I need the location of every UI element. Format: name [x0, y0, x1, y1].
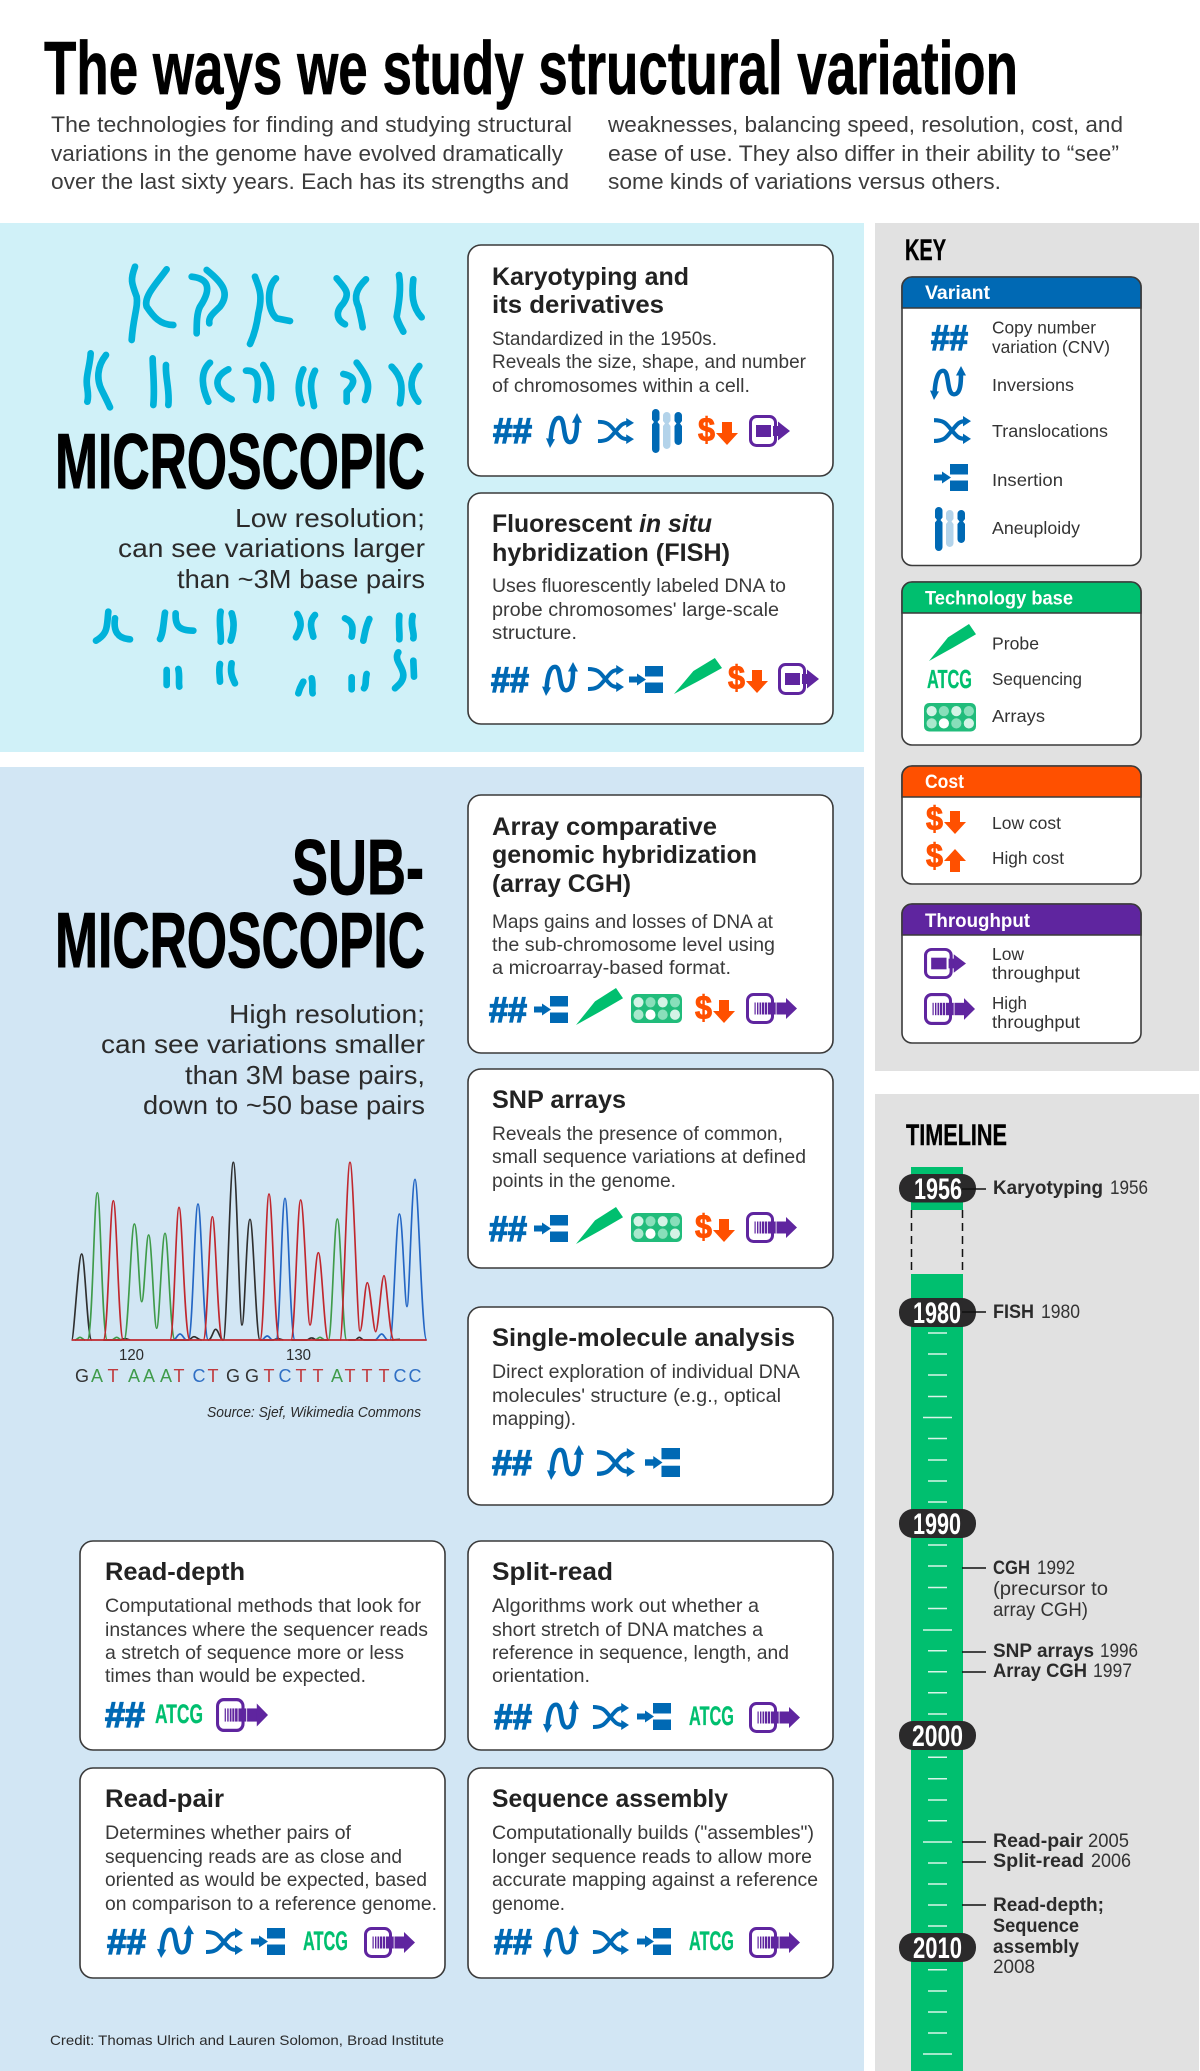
chart base letters: C: [192, 1366, 206, 1386]
card description: accurate mapping against a reference: [492, 1869, 818, 1891]
chart axis numbers: [119, 1347, 311, 1364]
chart base letters: C: [278, 1366, 292, 1386]
chart base letters: G: [226, 1366, 240, 1386]
card: array CGH: [468, 795, 833, 1053]
icon: insertion: [645, 1448, 680, 1477]
timeline entry: array CGH: Array CGH: [993, 1660, 1087, 1682]
label: high throughput: throughput: [992, 1012, 1080, 1032]
card description: Maps gains and losses of DNA at: [492, 911, 774, 933]
text: microscopic resolution: Low resolution;: [235, 503, 425, 533]
label: insertion: Insertion: [992, 470, 1063, 490]
chart base letters: T: [174, 1366, 184, 1386]
card description: Reveals the presence of common,: [492, 1123, 783, 1145]
card: single-molecule analysis: [468, 1307, 833, 1505]
chart base letters: T: [208, 1366, 218, 1386]
text: microscopic resolution: can see variations larger: [118, 533, 425, 563]
label: low cost: Low cost: [992, 813, 1061, 833]
chart base letters: C: [394, 1366, 406, 1386]
icon: probe: [576, 1207, 623, 1244]
timeline entry: read-depth and sequence assembly: Read-depth;: [993, 1894, 1104, 1916]
card description: a stretch of sequence more or less: [105, 1642, 404, 1664]
timeline entry: read-depth and sequence assembly: 2008: [993, 1956, 1035, 1978]
label: low throughput: throughput: [992, 963, 1080, 983]
timeline entry: FISH: FISH: [993, 1301, 1034, 1323]
card icons: [494, 1923, 800, 1962]
timeline bar: [911, 1167, 963, 2071]
card heading: Single-molecule analysis: [492, 1324, 795, 1352]
icon: low cost: $: [695, 1208, 712, 1245]
icon: sequencing: ATCG: [689, 1701, 734, 1731]
card: sequence assembly: [468, 1768, 833, 1978]
card description: genome.: [492, 1893, 565, 1915]
card description: [492, 1822, 818, 1915]
chart base letters: T: [378, 1366, 390, 1386]
card description: orientation.: [492, 1665, 590, 1687]
icon: high throughput: [218, 1700, 268, 1730]
timeline entry: read-pair: 2005: [1088, 1830, 1129, 1852]
heading: sub-microscopic: [55, 823, 425, 984]
icon: inversion: [547, 1445, 584, 1480]
icon: translocation: [934, 416, 971, 444]
chart axis numbers: 130: [286, 1347, 311, 1364]
chart: sequencing chromatogram: [72, 1162, 427, 1421]
icon: low cost: $: [728, 659, 745, 696]
icon: copy number: ##: [105, 1696, 145, 1735]
chart base letters: T: [296, 1366, 306, 1386]
card: split-read: [468, 1541, 833, 1750]
text: sub-microscopic resolution: down to ~50 base pairs: [143, 1090, 425, 1120]
card description: oriented as would be expected, based: [105, 1869, 427, 1891]
card heading: genomic hybridization: [492, 841, 757, 869]
text: sub-microscopic resolution: High resolution;: [229, 999, 425, 1029]
card heading: [492, 510, 730, 567]
timeline entry: read-pair: Read-pair: [993, 1830, 1083, 1852]
card icons: [491, 658, 819, 700]
panel: key: [875, 223, 1199, 1071]
intro text: over the last sixty years. Each has its strengths and: [51, 169, 569, 194]
chart base letters: A: [128, 1366, 140, 1386]
timeline entry: karyotyping: 1956: [1110, 1177, 1148, 1199]
illustration: chromosomes upper: [87, 267, 422, 407]
timeline entry: CGH: [993, 1557, 1108, 1621]
year pill: 1990: 1990: [913, 1508, 961, 1541]
icon: insertion: [637, 1703, 671, 1730]
card description: a microarray-based format.: [492, 957, 731, 979]
intro text: [51, 112, 1123, 194]
label: aneuploidy: Aneuploidy: [992, 518, 1080, 538]
icon: translocation: [593, 1703, 629, 1730]
icon: inversion: [546, 413, 582, 448]
icon: insertion: [629, 666, 663, 693]
card description: short stretch of DNA matches a: [492, 1619, 763, 1641]
chart base letters: T: [108, 1366, 118, 1386]
chart base letters: T: [264, 1366, 274, 1386]
year pill: 1980: 1980: [913, 1297, 961, 1330]
icon: aneuploidy: [652, 409, 682, 453]
icon: arrays: [631, 1213, 682, 1242]
card description: [492, 911, 775, 979]
timeline entry: CGH: 1992: [1037, 1557, 1075, 1579]
intro text: The technologies for finding and studying structural: [51, 112, 572, 137]
icon: translocation: [598, 418, 634, 444]
icon: high throughput: [926, 995, 975, 1023]
card heading: Split-read: [492, 1558, 613, 1586]
icon: copy number: ##: [493, 412, 532, 451]
card description: molecules' structure (e.g., optical: [492, 1385, 781, 1407]
icon: high cost: [926, 837, 966, 874]
card heading: Karyotyping and: [492, 263, 689, 291]
text: sub-microscopic resolution: [101, 999, 425, 1120]
timeline entry: FISH: [993, 1301, 1080, 1323]
icon: copy number: ##: [492, 1444, 532, 1483]
icon: high throughput: [750, 1704, 800, 1732]
label: copy number: variation (CNV): [992, 337, 1110, 357]
timeline entry: karyotyping: Karyotyping: [993, 1177, 1103, 1199]
timeline entry: CGH: CGH: [993, 1557, 1030, 1579]
card heading: [492, 813, 757, 898]
credit: Credit: Thomas Ulrich and Lauren Solomon, Broad Institute: [50, 2032, 444, 2048]
label: low throughput: Low: [992, 944, 1024, 964]
chart base letters: T: [344, 1366, 356, 1386]
card heading: Read-depth: [105, 1558, 245, 1586]
icon: inversion: [157, 1925, 194, 1958]
icon: low cost: $: [926, 800, 943, 837]
label: low throughput: [992, 944, 1080, 983]
label: inversions: Inversions: [992, 375, 1074, 395]
card description: on comparison to a reference genome.: [105, 1893, 437, 1915]
card description: sequencing reads are as close and: [105, 1846, 402, 1868]
card: FISH: [468, 493, 833, 724]
icon: insertion: [534, 996, 568, 1023]
timeline entry: SNP arrays: SNP arrays: [993, 1640, 1094, 1662]
card heading: Array comparative: [492, 813, 717, 841]
card heading: [492, 263, 689, 319]
timeline heading: TIMELINE: [906, 1119, 1007, 1152]
text: microscopic resolution: than ~3M base pairs: [177, 564, 425, 594]
label: high throughput: High: [992, 993, 1027, 1013]
chart base letters: A: [143, 1366, 155, 1386]
icon: insertion: [934, 464, 968, 491]
card heading: SNP arrays: [492, 1086, 626, 1114]
intro text: some kinds of variations versus others.: [608, 169, 1001, 194]
chart base letters: A: [331, 1366, 343, 1386]
card description: [492, 575, 786, 644]
icon: copy number: ##: [491, 661, 529, 700]
icon: probe: [576, 988, 623, 1025]
icon: low cost: [728, 659, 768, 696]
year pill: 2010: 2010: [913, 1932, 962, 1965]
icon: low throughput: [750, 416, 790, 446]
card description: structure.: [492, 622, 577, 644]
card description: times than would be expected.: [105, 1665, 366, 1687]
card description: reference in sequence, length, and: [492, 1642, 789, 1664]
icon: low cost: $: [698, 411, 715, 448]
card description: Computational methods that look for: [105, 1595, 422, 1617]
card description: Uses fluorescently labeled DNA to: [492, 575, 786, 597]
icon: low cost: [698, 411, 738, 448]
card icons: [492, 1444, 680, 1483]
icon: translocation: [206, 1928, 243, 1955]
intro text: weaknesses, balancing speed, resolution, cost, and: [607, 112, 1123, 137]
card description: [105, 1822, 437, 1915]
card icons: [494, 1698, 800, 1737]
icon: copy number: ##: [931, 319, 968, 358]
card heading: Sequence assembly: [492, 1785, 728, 1813]
icon: low cost: [926, 800, 966, 837]
timeline entry: read-pair: [993, 1830, 1129, 1852]
icon: low throughput: [926, 949, 966, 978]
card description: Standardized in the 1950s.: [492, 328, 717, 350]
timeline entry: SNP arrays: 1996: [1100, 1640, 1138, 1662]
icon: sequencing: ATCG: [155, 1699, 203, 1729]
card description: Determines whether pairs of: [105, 1822, 352, 1844]
panel: timeline: [875, 1094, 1199, 2071]
icon: sequencing: ATCG: [927, 664, 972, 694]
icon: probe: [929, 624, 976, 661]
year pill: 2000: 2000: [912, 1720, 963, 1753]
label: arrays: Arrays: [992, 706, 1045, 726]
key box heading: Cost: [925, 772, 965, 793]
timeline entry: read-depth and sequence assembly: Sequence: [993, 1915, 1079, 1937]
card description: points in the genome.: [492, 1170, 676, 1192]
label: copy number: Copy number: [992, 318, 1096, 338]
text: sub-microscopic resolution: than 3M base pairs,: [185, 1060, 425, 1090]
card description: the sub-chromosome level using: [492, 934, 775, 956]
icon: arrays: [631, 994, 682, 1023]
timeline entry: CGH: array CGH): [993, 1599, 1088, 1621]
card description: small sequence variations at defined: [492, 1146, 806, 1168]
intro text: ease of use. They also differ in their ability to “see”: [608, 141, 1119, 166]
heading: microscopic: MICROSCOPIC: [55, 417, 425, 505]
icon: translocation: [588, 665, 624, 692]
card description: probe chromosomes' large-scale: [492, 599, 779, 621]
key box heading: Technology base: [925, 588, 1073, 610]
timeline entry: split-read: 2006: [1091, 1850, 1131, 1872]
icon: inversion: [543, 1700, 579, 1733]
timeline entry: read-depth and sequence assembly: [993, 1894, 1104, 1978]
icon: insertion: [251, 1928, 285, 1955]
chart base letters: T: [362, 1366, 372, 1386]
icon: copy number: ##: [489, 991, 527, 1030]
card heading: Fluorescent in situ: [492, 510, 712, 538]
label: translocations: Translocations: [992, 421, 1108, 441]
icon: copy number: ##: [107, 1923, 146, 1962]
chart base letters: A: [91, 1366, 103, 1386]
text: microscopic resolution: [118, 503, 425, 594]
chart base letters: G: [75, 1366, 89, 1386]
card: karyotyping: [468, 245, 833, 476]
card description: [492, 1361, 800, 1430]
icon: inversion: [542, 662, 578, 696]
icon: copy number: ##: [494, 1923, 532, 1962]
card: read-pair: [80, 1768, 445, 1978]
panel: microscopic: [0, 223, 864, 752]
icon: inversion: [543, 1925, 579, 1958]
card heading: (array CGH): [492, 870, 631, 898]
leader lines: [962, 1189, 986, 1905]
card description: [105, 1595, 428, 1687]
card icons: [107, 1923, 415, 1962]
key box: variant: [902, 277, 1141, 566]
card heading: hybridization (FISH): [492, 539, 730, 567]
icon: arrays: [924, 703, 976, 732]
card description: Algorithms work out whether a: [492, 1595, 759, 1617]
icon: low cost: $: [695, 989, 712, 1026]
card: read-depth: [80, 1541, 445, 1750]
card description: Computationally builds ("assembles"): [492, 1822, 814, 1844]
heading: sub-microscopic: SUB-: [292, 823, 424, 911]
intro text: variations in the genome have evolved dramatically: [51, 141, 563, 166]
icon: high cost: $: [926, 837, 943, 874]
icon: sequencing: ATCG: [689, 1926, 734, 1956]
card description: instances where the sequencer reads: [105, 1619, 428, 1641]
timeline entry: array CGH: 1997: [1093, 1660, 1132, 1682]
heading: sub-microscopic: MICROSCOPIC: [55, 896, 425, 984]
chart source: Source: Sjef, Wikimedia Commons: [207, 1405, 421, 1421]
icon: copy number: ##: [494, 1698, 532, 1737]
timeline entry: FISH: 1980: [1041, 1301, 1080, 1323]
text: sub-microscopic resolution: can see variations smaller: [101, 1029, 425, 1059]
card heading: its derivatives: [492, 291, 664, 319]
icon: low cost: [695, 1208, 735, 1245]
key box heading: Variant: [925, 283, 991, 304]
card description: of chromosomes within a cell.: [492, 375, 750, 397]
label: high throughput: [992, 993, 1080, 1032]
card description: Reveals the size, shape, and number: [492, 351, 806, 373]
label: copy number: [992, 318, 1110, 357]
chart base letters: G: [245, 1366, 259, 1386]
key box: throughput: [902, 904, 1141, 1043]
card icons: [489, 1207, 797, 1249]
icon: sequencing: ATCG: [303, 1926, 348, 1956]
illustration: chromosomes lower: [96, 612, 414, 693]
card heading: Read-pair: [105, 1785, 224, 1813]
timeline entry: split-read: [993, 1850, 1131, 1872]
label: high cost: High cost: [992, 848, 1064, 868]
timeline entry: read-depth and sequence assembly: assembly: [993, 1936, 1079, 1958]
year pill: 1956: 1956: [914, 1173, 962, 1206]
icon: insertion: [534, 1215, 568, 1242]
card description: Direct exploration of individual DNA: [492, 1361, 800, 1383]
icon: high throughput: [748, 1214, 797, 1242]
icon: high throughput: [366, 1928, 415, 1956]
card description: [492, 1123, 806, 1192]
timeline entry: split-read: Split-read: [993, 1850, 1084, 1872]
key heading: KEY: [905, 234, 946, 267]
label: probe: Probe: [992, 634, 1039, 654]
icon: insertion: [637, 1928, 671, 1955]
timeline entry: CGH: (precursor to: [993, 1578, 1108, 1600]
chart base letters: A: [160, 1366, 172, 1386]
icon: copy number: ##: [489, 1210, 527, 1249]
card icons: [493, 409, 790, 453]
icon: probe: [674, 658, 722, 694]
card: SNP arrays: [468, 1069, 833, 1268]
icon: inversion: [930, 366, 966, 400]
card description: longer sequence reads to allow more: [492, 1846, 812, 1868]
icon: low cost: [695, 989, 735, 1026]
card icons: [489, 988, 797, 1030]
icon: translocation: [593, 1928, 629, 1955]
icon: translocation: [597, 1448, 635, 1477]
card description: [492, 328, 806, 397]
chart base letters: T: [312, 1366, 324, 1386]
icon: aneuploidy: [935, 507, 965, 551]
key box: technology base: [902, 582, 1141, 745]
card description: [492, 1595, 789, 1687]
key box heading: Throughput: [925, 911, 1031, 932]
chart axis numbers: 120: [119, 1347, 144, 1364]
card description: mapping).: [492, 1408, 576, 1430]
icon: high throughput: [750, 1928, 800, 1956]
icon: high throughput: [748, 994, 797, 1022]
label: sequencing: Sequencing: [992, 669, 1082, 689]
chart base letters: C: [408, 1366, 422, 1386]
icon: low throughput: [780, 664, 819, 694]
card icons: [105, 1696, 268, 1735]
key box: cost: [902, 766, 1141, 884]
